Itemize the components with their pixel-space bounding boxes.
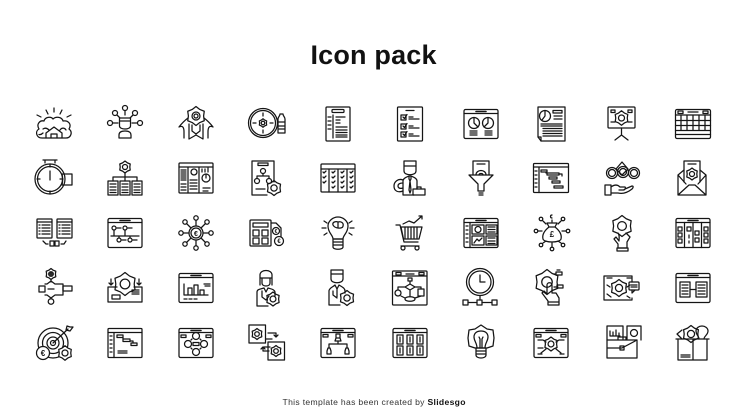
icon: gantt chart window (534, 164, 568, 192)
icon: envelope with gear (678, 161, 706, 195)
icon: shopping cart with growth chart (396, 216, 422, 250)
icon: euro network: € (194, 231, 198, 238)
icon: man with gear (329, 270, 354, 306)
icon: document with list (326, 107, 350, 141)
icon: dashboard panels (464, 218, 498, 248)
icon: money bag network (534, 215, 570, 251)
icon: target with euro and gear: € (41, 349, 46, 358)
icon: clock with chain (463, 268, 497, 305)
icon: brain with home (37, 108, 71, 138)
icon: businessman with gear and briefcase (394, 161, 425, 195)
icon: six-card grid window (393, 328, 427, 358)
icon: hand holding gear (613, 216, 631, 251)
icon: hand holding euro coins (605, 162, 640, 195)
footer credit: This template has been created by Slidesgo (282, 397, 466, 407)
icon: circles diagram window (179, 328, 213, 358)
icon: stopwatch (35, 160, 72, 194)
icon: gear flowchart (39, 268, 72, 304)
icon: paired lists with exchange arrows (37, 219, 72, 246)
icon: calculator with euro: € (275, 229, 278, 235)
icon: flowchart window (392, 271, 427, 305)
icon: exchanging gear documents (249, 325, 284, 360)
icon: gauge and bottle (248, 108, 285, 138)
icon: hierarchy window (321, 328, 355, 358)
icon: window with pie charts (464, 110, 498, 138)
icon: pie report document (538, 107, 565, 141)
icon: gear card (108, 272, 142, 302)
icon: funnel with gear document (469, 161, 493, 195)
icon: calculator with euro: € (277, 239, 281, 245)
icon: gear with lightbulb (468, 325, 494, 358)
icon: presentation board with gear (608, 107, 635, 140)
icon: finger pressing gear (536, 270, 563, 305)
icon: column planner (676, 218, 710, 248)
icon: money bag network: £ (550, 230, 555, 239)
icon: person with connected nodes (108, 106, 142, 138)
icon: calculator with euro (250, 220, 284, 246)
icon: gear over org documents (108, 161, 142, 195)
icon: lightbulb with brain (322, 217, 354, 249)
icon: checklist (398, 107, 422, 141)
icon: gantt schedule window (108, 328, 142, 358)
icon: dashboard report (179, 163, 213, 193)
icon: businesswoman with gear (257, 270, 279, 306)
icon: gear badge with ribbon (179, 106, 213, 139)
icon: calendar grid (676, 110, 710, 138)
icon: target with euro and gear (36, 326, 73, 360)
icon: euro network (179, 216, 213, 250)
title: Icon pack (310, 40, 437, 70)
icon: clipboard hierarchy with gear (252, 161, 281, 196)
icon: timeline window (108, 218, 142, 248)
icon: connected lists window (676, 274, 710, 302)
icon: window with bar chart (179, 274, 213, 302)
icon: checklist calendar (321, 164, 355, 192)
icon: box with gear and bulb (676, 326, 709, 360)
icon: briefcase with charts (607, 326, 641, 358)
icon: central gear linked window (534, 328, 568, 358)
icon: gear window with chat (604, 276, 639, 300)
